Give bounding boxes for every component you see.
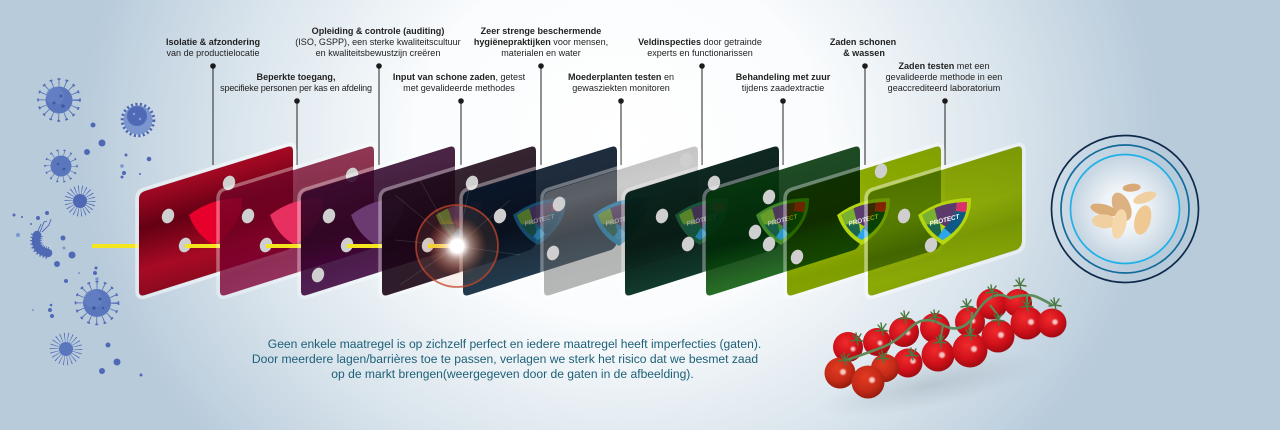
label 6: Moederplanten testen en xyxy=(568,72,674,82)
icon: shield 7: PROTECT xyxy=(686,213,718,228)
label 10: gevalideerde methode in een xyxy=(886,72,1002,82)
pathogens cluster xyxy=(12,79,154,376)
label 6: gewasziekten monitoren xyxy=(572,83,670,93)
icon: bacterium xyxy=(36,219,51,253)
icon: seeds xyxy=(1089,183,1158,240)
label 5: hygiënepraktijken voor mensen, xyxy=(474,37,608,47)
label 5: Zeer strenge beschermende xyxy=(481,26,601,36)
barrier panels xyxy=(92,144,1024,297)
icon: virus 3 xyxy=(45,150,77,182)
panel 8 xyxy=(704,144,862,297)
labels xyxy=(166,26,1002,93)
icon: shield 5 xyxy=(503,195,568,250)
panel 10 xyxy=(866,144,1024,297)
label 5: materialen en water xyxy=(501,48,581,58)
icon: shield 8 xyxy=(746,195,811,250)
label 8: tijdens zaadextractie xyxy=(742,83,824,93)
label 8: Behandeling met zuur xyxy=(736,72,831,82)
panel 6: PROTECT xyxy=(605,213,637,228)
label 4: met gevalideerde methodes xyxy=(403,83,515,93)
label 2: Beperkte toegang, xyxy=(257,72,335,82)
icon: shield 7 xyxy=(665,195,730,250)
label 3: en kwaliteitsbewustzijn creëren xyxy=(316,48,440,58)
caption xyxy=(252,337,761,381)
label 7: Veldinspecties door getrainde xyxy=(638,37,762,47)
label 9: & wassen xyxy=(843,48,885,58)
panel 5 xyxy=(461,144,619,297)
label 1: van de productielocatie xyxy=(166,48,260,58)
icon: virus 1 xyxy=(38,79,80,121)
panel 9 xyxy=(785,144,943,297)
label 7: experts en functionarissen xyxy=(647,48,753,58)
icon: shield 9 xyxy=(827,195,892,250)
label 3: (ISO, GSPP), een sterke kwaliteitscultuur xyxy=(295,37,461,47)
icon: virus 2 xyxy=(122,104,154,136)
label 10: geaccrediteerd laboratorium xyxy=(888,83,1000,93)
panel 6 xyxy=(542,144,700,297)
icon: virus 6 xyxy=(54,338,78,360)
seeds in protective rings xyxy=(1052,136,1198,282)
panel 3 xyxy=(299,144,457,297)
label 1: Isolatie & afzondering xyxy=(166,37,260,47)
caption: Geen enkele maatregel is op zichzelf perfect en iedere maatregel heeft imperfecties (gaten). xyxy=(268,337,761,351)
leader lines with dots xyxy=(210,63,948,165)
tomato vine xyxy=(813,278,1066,430)
lens flare xyxy=(395,180,520,287)
arrow: incoming beam xyxy=(92,244,139,248)
panel 2 xyxy=(218,144,376,297)
panel 7 xyxy=(623,144,781,297)
icon: shield 5: PROTECT xyxy=(524,213,556,228)
label 2: specifieke personen per kas en afdeling xyxy=(220,83,372,93)
icon: shield 8: PROTECT xyxy=(767,213,799,228)
label 10: Zaden testen met een xyxy=(898,61,990,71)
icon: shield 9: PROTECT xyxy=(848,213,880,228)
panel 1 xyxy=(137,144,295,297)
panel 4 xyxy=(380,144,538,297)
pathogen particles xyxy=(12,122,151,376)
label 9: Zaden schonen xyxy=(830,37,896,47)
caption: op de markt brengen(weergegeven door de gaten in de afbeelding). xyxy=(331,367,694,381)
icon: protect shield: PROTECT xyxy=(929,213,961,228)
icon: virus 5 xyxy=(76,282,118,324)
caption: Door meerdere lagen/barrières toe te passen, verlagen we sterk het risico dat we besmet zaad xyxy=(252,352,758,366)
icon: protect shield xyxy=(908,195,973,250)
label 3: Opleiding & controle (auditing) xyxy=(312,26,444,36)
label 4: Input van schone zaden, getest xyxy=(393,72,525,82)
icon: virus 4 xyxy=(69,190,91,212)
